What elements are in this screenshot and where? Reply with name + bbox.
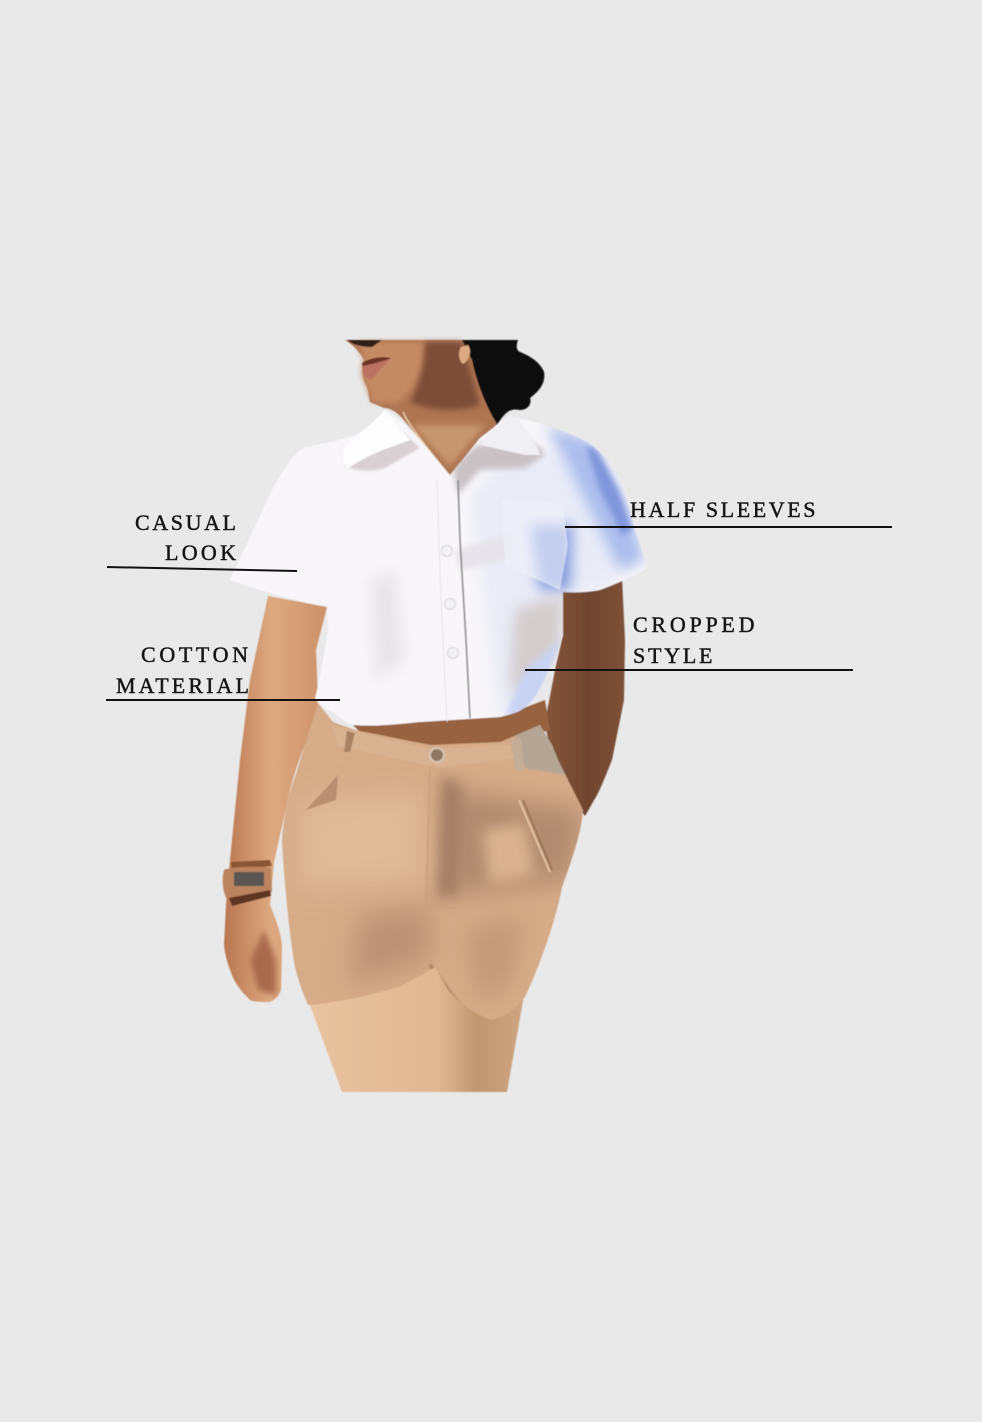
- shorts: [282, 703, 585, 1020]
- collar: [343, 410, 410, 468]
- midriff: [350, 700, 550, 745]
- fly: [426, 770, 458, 908]
- label: casual look: LOOK: [165, 540, 236, 565]
- label: cotton material: [106, 642, 340, 700]
- placket line: [458, 480, 470, 718]
- label: casual look: CASUAL: [135, 510, 236, 535]
- lips: [362, 357, 391, 379]
- sunglasses edge: [347, 340, 382, 347]
- pleats: [306, 775, 338, 810]
- pocket: [502, 500, 568, 590]
- left arm and hand: [224, 596, 327, 1002]
- necklace: [403, 412, 449, 476]
- infographic canvas: [106, 337, 892, 1093]
- label: cotton material: MATERIAL: [116, 673, 249, 698]
- label: cropped style: [525, 612, 853, 670]
- label: cropped style: STYLE: [633, 643, 712, 668]
- bracelets: [223, 860, 272, 906]
- label: half sleeves: HALF SLEEVES: [630, 497, 816, 522]
- waistband: [332, 726, 515, 768]
- face and neck: [345, 340, 497, 476]
- buttons: [442, 546, 458, 658]
- label: cotton material: COTTON: [141, 642, 248, 667]
- label: cropped style: CROPPED: [633, 612, 754, 637]
- model photo illustration: [223, 340, 647, 1092]
- label: casual look: [107, 510, 297, 571]
- lower legs: [308, 960, 525, 1092]
- shirt: [230, 410, 647, 726]
- waist button: [430, 748, 444, 762]
- earring: [459, 345, 470, 364]
- hair: [456, 340, 544, 425]
- right arm: [545, 578, 625, 816]
